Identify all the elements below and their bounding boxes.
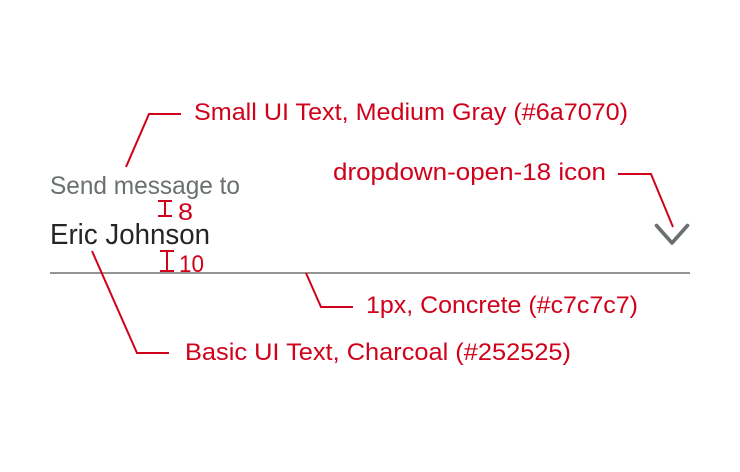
callout: small UI text: Small UI Text, Medium Gray (#6a7070) — [194, 99, 628, 126]
divider line — [50, 272, 690, 274]
spacing marker: 10: 10 — [179, 251, 204, 278]
spacing marker: 8 — [158, 199, 193, 226]
callout: basic UI text: Basic UI Text, Charcoal (#252525) — [185, 339, 571, 366]
spacing marker: 10 — [160, 251, 204, 278]
callout: dropdown icon — [333, 159, 673, 227]
icon: dropdown chevron — [656, 226, 688, 243]
name text: Eric Johnson: Eric Johnson — [50, 219, 210, 251]
label text: Send message to: Send message to — [50, 172, 240, 200]
spacing marker: 8: 8 — [178, 199, 193, 226]
callout: basic UI text — [92, 251, 571, 366]
callout: divider line — [306, 273, 638, 319]
callout: divider line: 1px, Concrete (#c7c7c7) — [366, 292, 638, 319]
callout: small UI text — [126, 99, 628, 167]
callout: dropdown icon: dropdown-open-18 icon — [333, 159, 606, 186]
